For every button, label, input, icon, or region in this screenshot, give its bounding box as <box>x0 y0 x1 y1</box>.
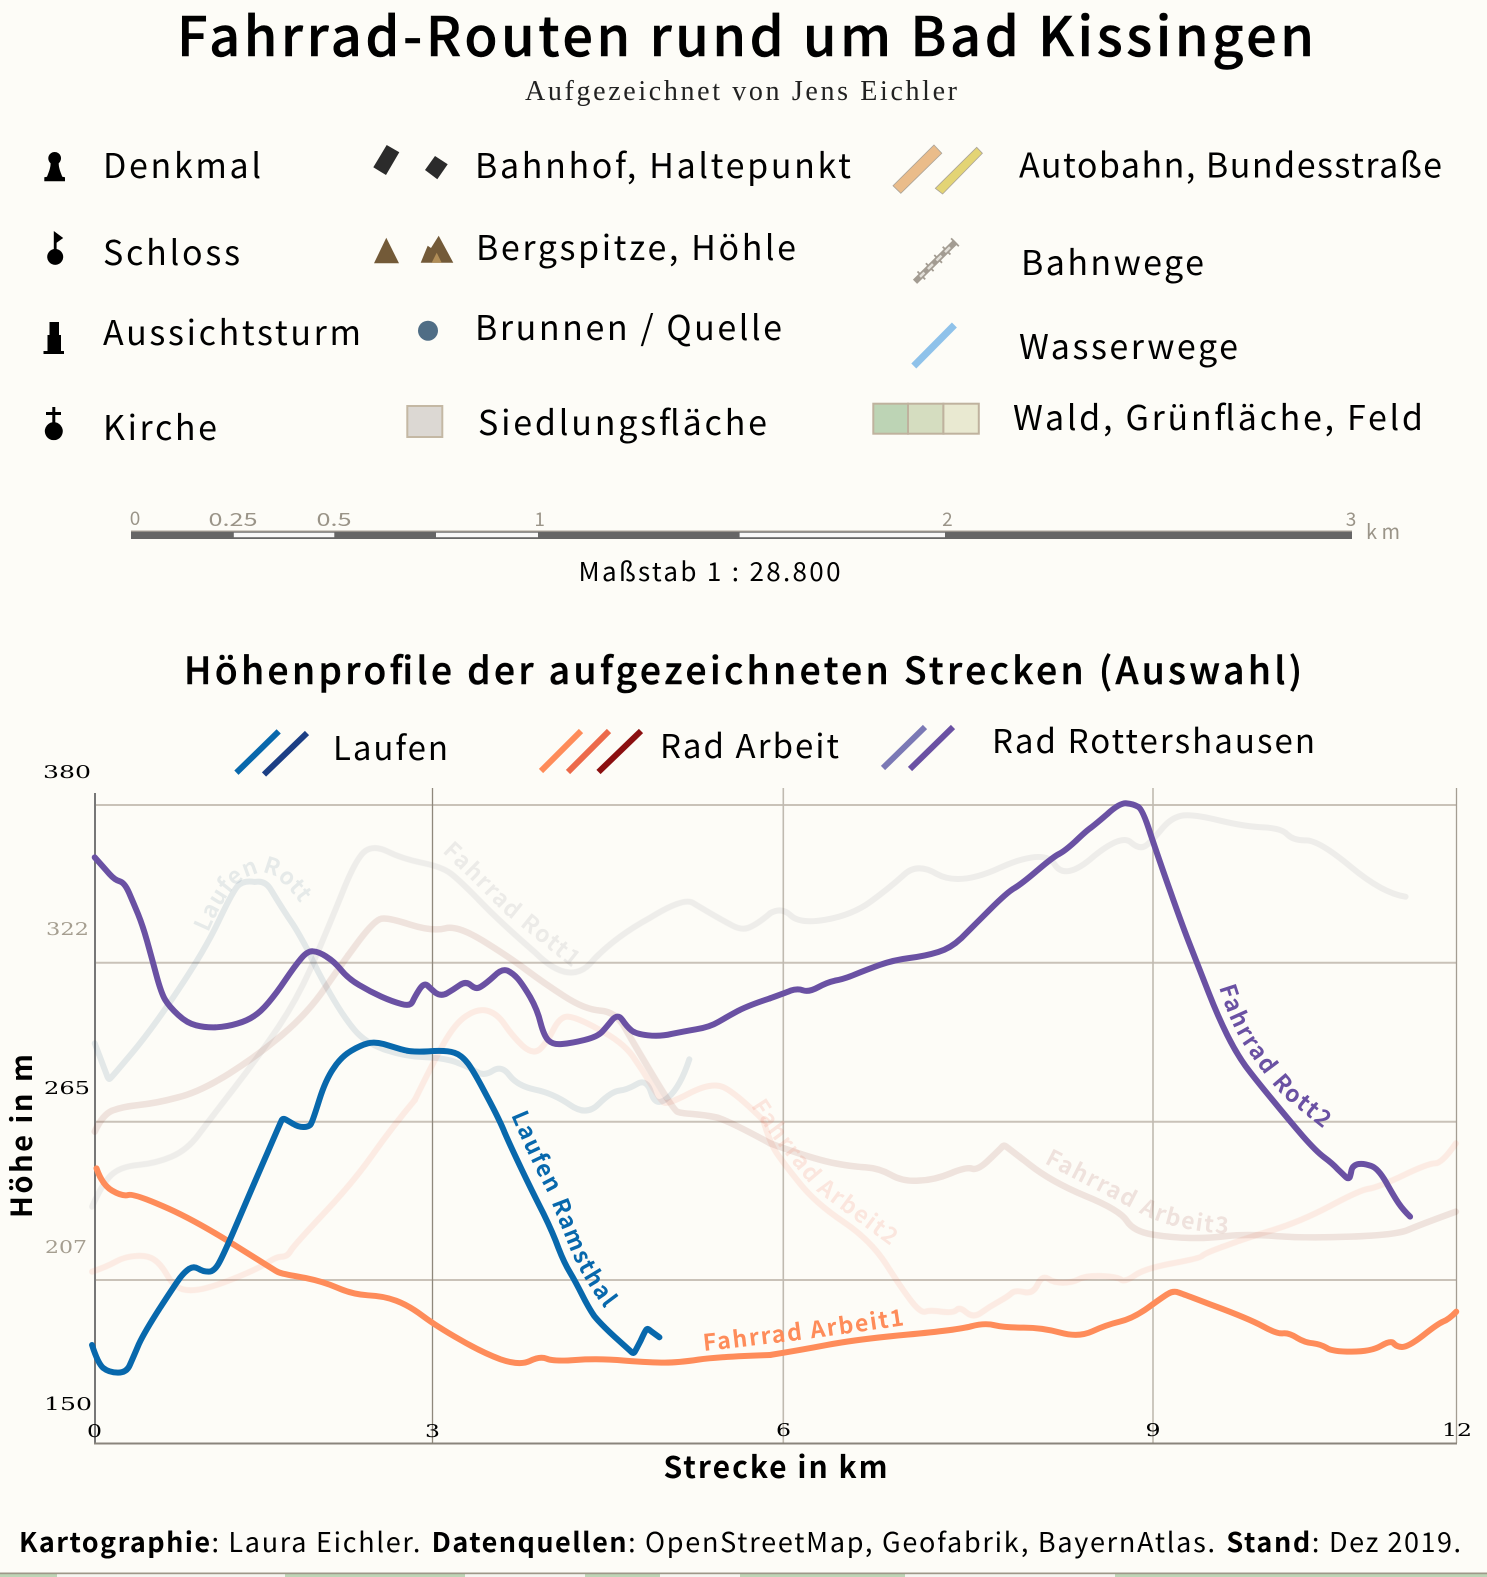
icon: Bahnhof, Haltepunkt <box>373 145 448 179</box>
scale bar: 3 <box>1346 505 1356 532</box>
chart legend: Rad Rottershausen <box>883 715 1315 769</box>
subtitle: Aufgezeichnet von Jens Eichler <box>525 76 958 107</box>
line: Laufen Ramsthal <box>92 1043 659 1373</box>
label: Fahrrad Arbeit2: Fahrrad Arbeit2 <box>752 1098 897 1245</box>
footer credits: Datenquellen: <box>432 1521 636 1560</box>
icon: Siedlungsfläche <box>407 406 442 437</box>
label: Bahnhof, Haltepunkt: Bahnhof, Haltepunkt <box>475 139 851 188</box>
line: Fahrrad Arbeit1 <box>97 1168 1456 1363</box>
y axis title: Höhe in m <box>0 1054 41 1218</box>
legend: map symbols <box>44 138 1442 450</box>
icon: Bahnwege <box>915 242 956 282</box>
y axis numbers <box>43 762 92 1415</box>
scale bar <box>130 504 1400 545</box>
label: Schloss: Schloss <box>103 226 240 275</box>
y axis numbers: 380 <box>43 762 91 783</box>
label: Wasserwege: Wasserwege <box>1019 320 1238 369</box>
icon: Bergspitze, Höhle <box>374 236 453 263</box>
footer credits: Laura Eichler. <box>228 1521 420 1560</box>
label: Laufen Ramsthal: Laufen Ramsthal <box>512 1110 618 1308</box>
label: Kirche: Kirche <box>103 401 217 450</box>
y axis numbers: 150 <box>44 1394 92 1415</box>
x axis numbers: 6 <box>776 1420 791 1441</box>
x axis numbers: 9 <box>1146 1420 1160 1441</box>
y axis numbers: 322 <box>46 919 89 940</box>
footer credits <box>19 1521 1461 1560</box>
scale bar: 0.25 <box>208 506 258 532</box>
footer credits: OpenStreetMap, Geofabrik, BayernAtlas. <box>645 1521 1215 1560</box>
line: Laufen Rott (faded) <box>95 882 689 1111</box>
chart legend: Laufen <box>236 722 448 774</box>
chart grid and axes <box>94 788 1457 1444</box>
label: Autobahn, Bundesstraße: Autobahn, Bundesstraße <box>1019 138 1442 188</box>
label: Fahrrad Arbeit1: Fahrrad Arbeit1 <box>704 1309 904 1351</box>
footer credits: Kartographie: <box>19 1521 219 1560</box>
x axis numbers: 12 <box>1442 1420 1472 1441</box>
chart legend: Rad Rottershausen: Rad Rottershausen <box>992 715 1315 763</box>
scale text: Maßstab 1 : 28.800 <box>578 552 840 589</box>
chart legend: Rad Arbeit <box>541 720 839 772</box>
icon: Aussichtsturm <box>44 322 64 354</box>
icon: Denkmal <box>44 152 65 181</box>
map strip at bottom edge <box>0 1572 1487 1577</box>
label: Denkmal: Denkmal <box>103 139 261 188</box>
icon: Schloss <box>47 231 63 265</box>
icon: Kirche <box>45 407 63 440</box>
chart legend: Laufen: Laufen <box>333 722 448 770</box>
scale bar: 1 <box>534 505 545 532</box>
scale bar: 0.5 <box>316 506 352 532</box>
scale bar: 0 <box>130 504 140 531</box>
line: Fahrrad Arbeit3 (faded) <box>95 918 1456 1238</box>
label: Brunnen / Quelle: Brunnen / Quelle <box>475 301 782 350</box>
label: Aussichtsturm: Aussichtsturm <box>103 306 361 355</box>
chart legend: Rad Arbeit: Rad Arbeit <box>660 720 839 768</box>
x axis numbers: 3 <box>425 1421 440 1442</box>
label: Bergspitze, Höhle: Bergspitze, Höhle <box>476 221 796 270</box>
label: Fahrrad Rott2: Fahrrad Rott2 <box>1220 984 1330 1128</box>
label: Bahnwege: Bahnwege <box>1021 236 1204 285</box>
x axis numbers <box>87 1420 1472 1442</box>
label: Siedlungsfläche: Siedlungsfläche <box>478 396 767 445</box>
label: Fahrrad Arbeit3: Fahrrad Arbeit3 <box>1046 1149 1228 1234</box>
line: Fahrrad Rott1 (faded) <box>92 815 1406 1207</box>
line: Fahrrad Arbeit2 (faded) <box>92 1010 1456 1315</box>
line: Fahrrad Rott2 <box>95 803 1410 1217</box>
icon: Brunnen <box>418 321 438 341</box>
label: Wald, Grünfläche, Feld: Wald, Grünfläche, Feld <box>1013 391 1423 440</box>
heading: Höhenprofile: Höhenprofile der aufgezeichneten Strecken (Auswahl) <box>184 641 1302 695</box>
y axis numbers: 265 <box>44 1078 90 1099</box>
scale bar: km <box>1366 516 1400 545</box>
icon: Wald, Grünfläche, Feld <box>873 404 979 434</box>
scale bar: 2 <box>942 505 953 532</box>
icon: Autobahn, Bundesstraße <box>893 145 982 194</box>
y axis numbers: 207 <box>45 1237 87 1258</box>
label: Laufen Rott: Laufen Rott <box>194 856 311 930</box>
x axis numbers: 0 <box>87 1421 102 1442</box>
x axis title: Strecke in km <box>664 1443 888 1487</box>
label: Fahrrad Rott1: Fahrrad Rott1 <box>444 841 579 967</box>
icon: Wasserwege <box>914 325 954 366</box>
footer credits: Dez 2019. <box>1329 1521 1461 1560</box>
footer credits: Stand: <box>1226 1521 1319 1560</box>
